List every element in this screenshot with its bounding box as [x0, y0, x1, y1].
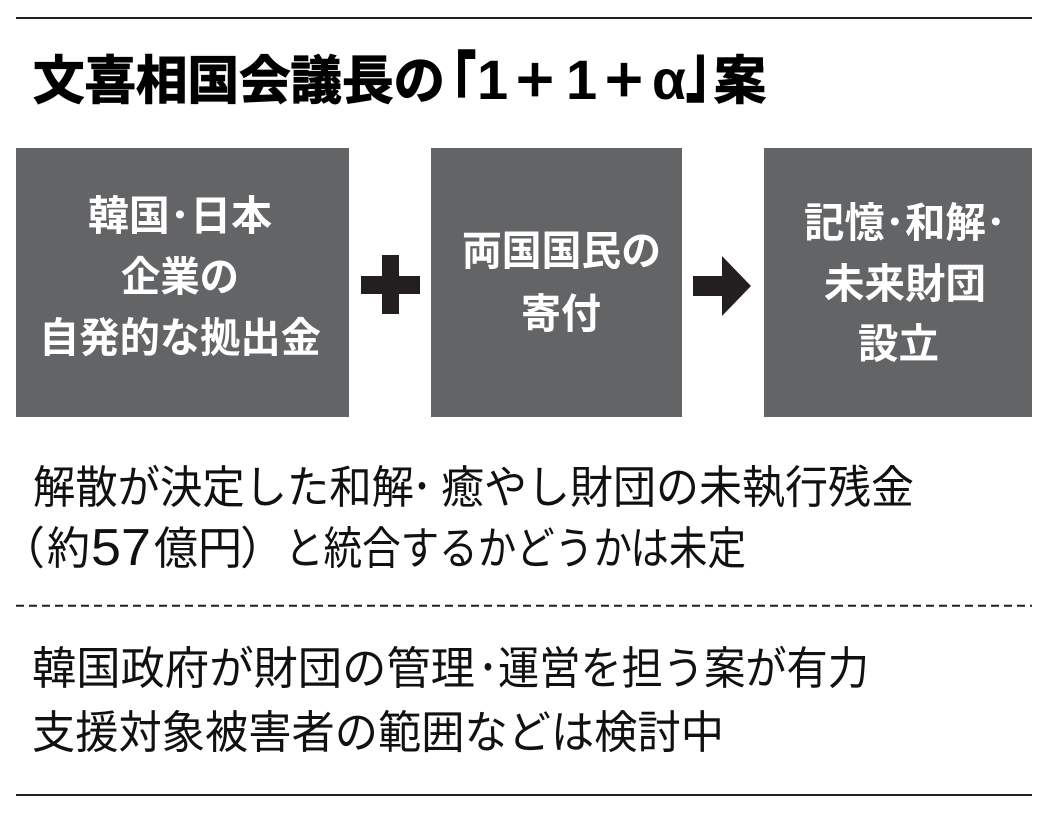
panel: donations from citizens: [431, 148, 682, 417]
title: 1: [566, 48, 597, 111]
panel: donations from citizens: 両国国民の: [462, 228, 661, 274]
title: 1: [477, 48, 508, 111]
title: 案: [714, 53, 766, 111]
title: [33, 31, 766, 128]
title: ＋: [602, 57, 646, 106]
panel: foundation: 記憶･和解･: [804, 200, 1006, 246]
panel: foundation: 未来財団: [824, 261, 986, 307]
title: 文喜相国会議長の: [33, 53, 445, 111]
panel: corporate contributions: 企業の: [121, 254, 239, 300]
panel: foundation: [764, 148, 1032, 417]
panel: donations from citizens: 寄付: [521, 291, 601, 337]
panel: foundation: 設立: [858, 321, 939, 367]
text block: management and scope: ･: [478, 643, 498, 694]
text block: undecided merger: と統合するかどうかは未定: [285, 523, 746, 574]
text block: undecided merger: 約: [47, 523, 90, 574]
text block: undecided merger: （: [0, 523, 45, 574]
title: α: [652, 48, 686, 111]
text block: undecided merger: [0, 462, 914, 577]
title: 」: [686, 31, 734, 111]
text block: undecided merger: 57: [91, 519, 151, 577]
text block: undecided merger: ･: [412, 462, 432, 513]
title: ＋: [513, 57, 557, 106]
panel: corporate contributions: 韓国･日本: [88, 193, 272, 239]
icon: plus: [361, 255, 420, 314]
text block: management and scope: 支援対象被害者の範囲などは検討中: [32, 707, 724, 758]
text block: management and scope: [32, 643, 869, 758]
panel: corporate contributions: 自発的な拠出金: [39, 315, 321, 361]
panel: corporate contributions: [16, 148, 349, 417]
title: 「: [428, 48, 476, 128]
text block: undecided merger: 癒やし財団の未執行残金: [441, 462, 914, 513]
text block: management and scope: 運営を担う案が有力: [498, 643, 869, 694]
arrow: [693, 256, 751, 316]
text block: undecided merger: ）: [240, 523, 285, 574]
text block: undecided merger: 解散が決定した和解: [33, 462, 414, 513]
text block: management and scope: 韓国政府が財団の管理: [32, 643, 475, 694]
text block: undecided merger: 億円: [154, 523, 242, 574]
